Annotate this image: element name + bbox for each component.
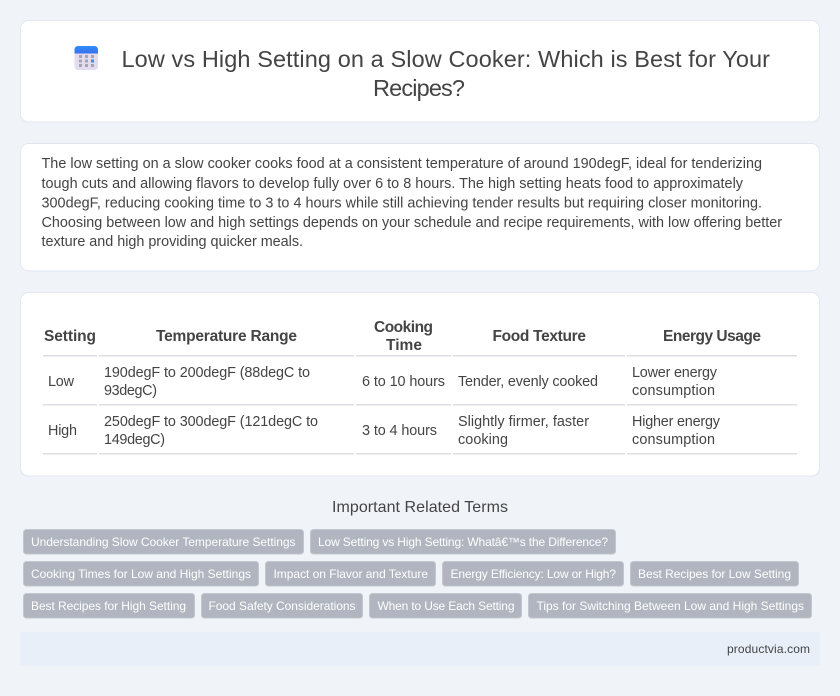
table header row — [44, 319, 761, 354]
intro text block: tough cuts and allowing flavors to develop fully over 6 to 8 hours. The high setting heats food to approximately — [42, 176, 744, 192]
tag: Low Setting vs High Setting: Whatâ€™s the Difference? — [318, 535, 608, 549]
table row: low: Tender, evenly cooked — [458, 374, 598, 390]
table row: high: 250degF to 300degF (121degC to — [104, 414, 318, 430]
table row: high: cooking — [458, 432, 508, 448]
tag: Best Recipes for Low Setting — [638, 567, 791, 581]
related term tags — [24, 530, 812, 618]
table header row: Temperature Range — [156, 328, 297, 345]
tag: Food Safety Considerations — [208, 599, 356, 613]
table row: high: 3 to 4 hours — [362, 423, 437, 439]
tag — [630, 562, 798, 586]
tag — [370, 594, 522, 618]
table row: low — [48, 365, 718, 399]
tag: Tips for Switching Between Low and High Settings — [536, 599, 804, 613]
table header row: Cooking — [374, 319, 433, 336]
table row: high: 149degC) — [104, 432, 165, 448]
intro text block: texture and high providing quicker meals. — [42, 234, 303, 250]
table row: high: consumption — [632, 432, 715, 448]
table row: low: 6 to 10 hours — [362, 374, 445, 390]
tag — [202, 594, 362, 618]
tag: Energy Efficiency: Low or High? — [450, 567, 616, 581]
table row: high: Higher energy — [632, 414, 721, 430]
tag — [442, 562, 624, 586]
intro text block — [42, 156, 782, 250]
table header row: Setting — [44, 328, 96, 345]
footer site name: productvia.com — [727, 642, 810, 656]
panel: header — [20, 20, 820, 122]
tag — [528, 594, 812, 618]
title: Recipes? — [373, 75, 465, 101]
tag: When to Use Each Setting — [378, 599, 514, 613]
tag — [24, 530, 304, 554]
table row: low: 190degF to 200degF (88degC to — [104, 365, 310, 381]
table header row: Energy Usage — [663, 328, 761, 345]
tag: Cooking Times for Low and High Settings — [31, 567, 251, 581]
table header row: Time — [386, 337, 422, 354]
heading: related terms: Important Related Terms — [332, 499, 508, 516]
table header row: Food Texture — [492, 328, 586, 345]
tag — [24, 562, 258, 586]
table row: low: Low — [48, 374, 75, 390]
tag: Best Recipes for High Setting — [31, 599, 186, 613]
icon: calendar — [74, 46, 98, 70]
title: Low vs High Setting on a Slow Cooker: Which is Best for Your — [122, 46, 770, 72]
table row: low: Lower energy — [632, 365, 718, 381]
table row: high: High — [48, 423, 77, 439]
panel: comparison table — [20, 292, 820, 476]
tag — [24, 594, 194, 618]
table row: high: Slightly firmer, faster — [458, 414, 589, 430]
table row: low: 93degC) — [104, 383, 157, 399]
intro text block: Choosing between low and high settings depends on your schedule and recipe requirements, with low offering better — [42, 215, 782, 231]
title — [122, 46, 770, 101]
table row: low: consumption — [632, 383, 715, 399]
table row: high — [48, 414, 721, 448]
intro text block: 300degF, reducing cooking time to 3 to 4 hours while still achieving tender results but requiring closer monitoring. — [42, 196, 762, 212]
intro text block: The low setting on a slow cooker cooks food at a consistent temperature of around 190degF, ideal for tenderizing — [42, 156, 762, 172]
tag: Impact on Flavor and Texture — [274, 567, 428, 581]
panel: introduction — [20, 144, 820, 271]
tag: Understanding Slow Cooker Temperature Settings — [31, 535, 296, 549]
tag — [266, 562, 436, 586]
footer — [20, 632, 820, 666]
tag — [310, 530, 616, 554]
